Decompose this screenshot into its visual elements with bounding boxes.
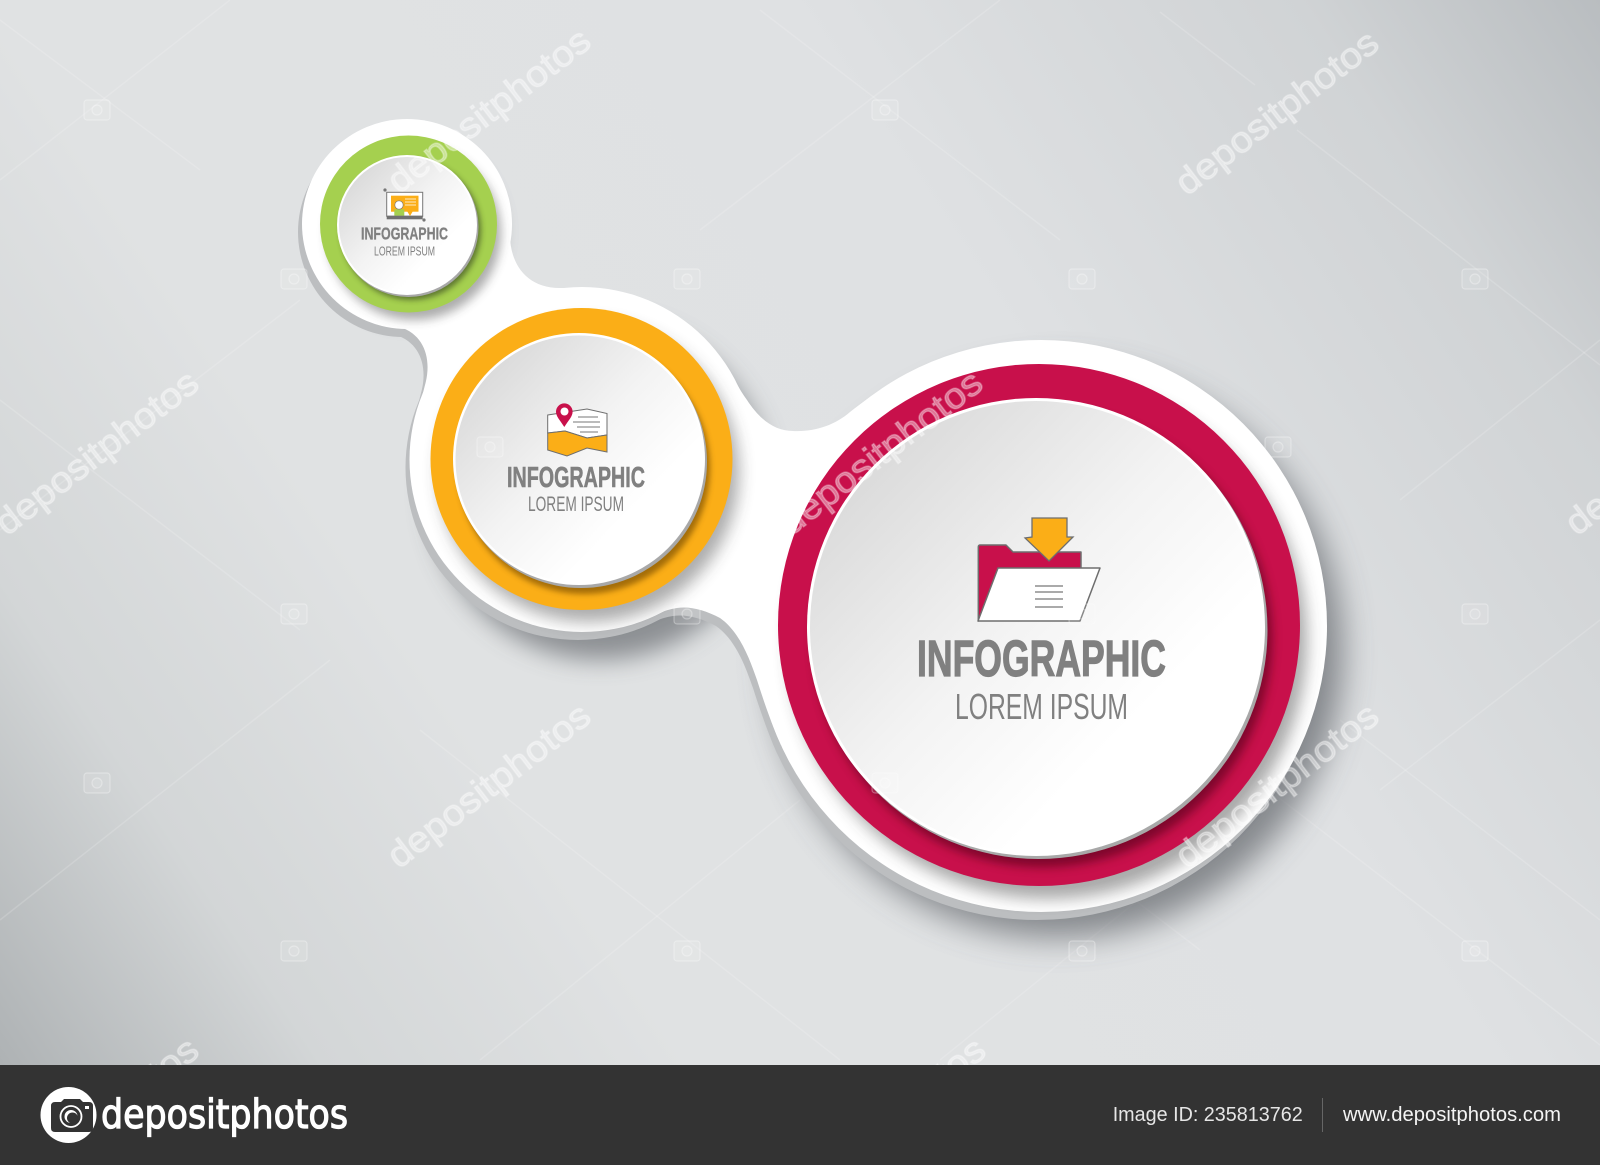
blob edge xyxy=(298,127,1323,920)
watermark: diagonal text: depositphotos xyxy=(379,694,598,876)
subheading: medium: LOREM IPSUM xyxy=(528,493,624,516)
heading: large: INFOGRAPHIC xyxy=(917,630,1166,687)
subheading: small: LOREM IPSUM xyxy=(374,244,435,258)
watermark: diagonal text: depositphotos xyxy=(1167,21,1386,203)
watermark: diagonal text: depositphotos xyxy=(379,19,598,201)
watermark: small camera marks xyxy=(84,100,1488,961)
watermark: diagonal text: depositphotos xyxy=(1167,694,1386,876)
watermark: diagonal text: depositphotos xyxy=(771,361,990,543)
heading: small: INFOGRAPHIC xyxy=(361,224,448,244)
icon: folder with download arrow xyxy=(978,518,1100,621)
icon: map with pin xyxy=(548,403,607,456)
blob shadows xyxy=(310,132,1343,938)
website url: www.depositphotos.com xyxy=(1342,1104,1561,1126)
node: small green circle xyxy=(320,136,501,320)
node: large red circle xyxy=(778,364,1307,899)
logo wordmark: depositphotos xyxy=(101,1092,348,1138)
node: medium orange circle xyxy=(430,308,739,622)
icon: camera logo xyxy=(40,1087,96,1143)
heading: medium: INFOGRAPHIC xyxy=(507,462,645,494)
icon: laptop with chat xyxy=(383,188,426,222)
subheading: large: LOREM IPSUM xyxy=(955,686,1128,727)
footer bar xyxy=(0,1065,1600,1165)
image id: Image ID: 235813762 xyxy=(1113,1104,1303,1126)
white connected panel xyxy=(302,119,1327,912)
